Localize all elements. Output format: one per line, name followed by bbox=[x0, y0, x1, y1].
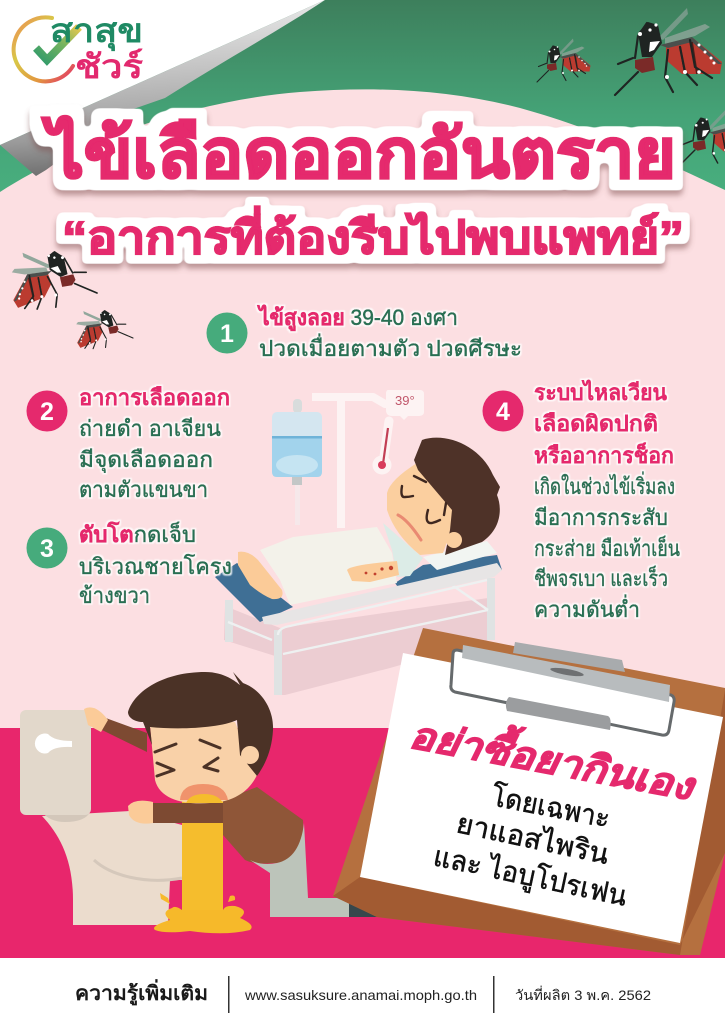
IV bag bbox=[272, 399, 322, 525]
patient hair bbox=[414, 438, 500, 555]
logo ring bbox=[14, 17, 73, 81]
vomit splash drops bbox=[160, 893, 235, 904]
subtitle: “อาการที่ต้องรีบไปพบแพทย์” bbox=[62, 206, 684, 263]
shoe bbox=[349, 898, 377, 917]
symptom 4 line: เกิดในช่วงไข้เริ่มลง bbox=[534, 471, 675, 499]
patient on bed illustration bbox=[215, 390, 502, 695]
collar bbox=[383, 523, 423, 577]
floor bbox=[0, 728, 725, 958]
toilet tank shadow bbox=[42, 812, 90, 822]
mosquito left large bbox=[0, 233, 97, 323]
clipboard line 2: ยาแอสไพริน bbox=[454, 808, 612, 870]
title: ไข้เลือดออกอันตราย bbox=[42, 115, 676, 192]
clipboard paper bbox=[360, 653, 723, 943]
pillow bbox=[423, 541, 497, 570]
footer bbox=[0, 958, 725, 1024]
symptom 3 heading: ตับโตกดเจ็บ bbox=[79, 520, 196, 547]
vomit in mouth bbox=[186, 794, 223, 803]
mosquito top right bbox=[615, 8, 722, 95]
thermometer bbox=[372, 421, 392, 474]
badge 4 bbox=[482, 390, 524, 432]
clip plate bbox=[462, 645, 670, 702]
clipboard line 1: โดยเฉพาะ bbox=[489, 779, 613, 834]
logo word pink: ชัวร์ bbox=[75, 48, 143, 85]
symptom 4 heading: ระบบไหลเวียน bbox=[534, 379, 667, 405]
number 4: 4 bbox=[496, 398, 510, 426]
symptom 4 line: มีอาการกระสับ bbox=[534, 505, 668, 530]
symptom 4 line: กระส่าย มือเท้าเย็น bbox=[534, 534, 680, 561]
green header band bbox=[0, 0, 725, 192]
toilet tank bbox=[20, 710, 91, 815]
symptom 2 bbox=[26, 385, 230, 502]
symptom 4 heading: เลือดผิดปกติ bbox=[534, 411, 658, 436]
patient face bbox=[387, 463, 463, 555]
bed top rail bbox=[262, 563, 502, 625]
mosquito right edge bbox=[680, 108, 725, 165]
clip hump bbox=[513, 642, 625, 672]
patient mouth bbox=[398, 515, 421, 540]
body bbox=[223, 787, 303, 864]
bed shadow panel bbox=[224, 598, 488, 695]
logo check mark bbox=[36, 27, 79, 60]
footer url: www.sasuksure.anamai.moph.go.th bbox=[244, 987, 477, 1003]
number 3: 3 bbox=[40, 535, 54, 563]
temperature bubble bbox=[386, 390, 424, 420]
man face bbox=[150, 722, 257, 803]
clip handle bbox=[506, 697, 611, 730]
front hand bbox=[128, 801, 153, 824]
symptom 4 line: ชีพจรเบา และเร็ว bbox=[534, 564, 668, 591]
symptom 2 line: มีจุดเลือดออก bbox=[79, 447, 213, 473]
back arm bbox=[102, 717, 147, 752]
bowl shadow line bbox=[94, 860, 182, 880]
symptom 2 line: ถ่ายดำ อาเจียน bbox=[79, 416, 221, 441]
white peeled corner bbox=[0, 0, 325, 145]
vomiting man illustration bbox=[20, 672, 377, 933]
symptom 2 heading: อาการเลือดออก bbox=[79, 385, 230, 410]
man hair bbox=[128, 672, 273, 776]
temperature text: 39° bbox=[395, 393, 415, 408]
patient eyes bbox=[401, 476, 446, 523]
footer date: วันที่ผลิต 3 พ.ค. 2562 bbox=[515, 986, 651, 1003]
vomit puddle bbox=[154, 906, 252, 933]
front arm bbox=[153, 803, 223, 823]
man mouth bbox=[180, 784, 228, 800]
number 2: 2 bbox=[40, 398, 54, 426]
symptom 4 bbox=[482, 379, 680, 622]
clipboard bottom edge bbox=[333, 690, 725, 955]
symptom 4 heading: หรืออาการช็อก bbox=[534, 441, 674, 468]
mosquito left small bbox=[67, 298, 133, 358]
symptom 1 second line: ปวดเมื่อยตามตัว ปวดศีรษะ bbox=[259, 333, 522, 361]
clip ring bbox=[451, 650, 674, 735]
bed rails bbox=[228, 580, 488, 654]
clipboard bbox=[333, 628, 725, 955]
back hand bbox=[84, 707, 108, 732]
footer heading: ความรู้เพิ่มเติม bbox=[75, 978, 208, 1007]
IV stand bbox=[312, 397, 392, 528]
symptom 2 line: ตามตัวแขนขา bbox=[79, 477, 208, 502]
mattress bbox=[215, 555, 502, 622]
man ear bbox=[241, 746, 259, 764]
clip slot bbox=[550, 666, 584, 678]
logo bbox=[14, 12, 143, 85]
flush handle bbox=[35, 734, 72, 754]
symptom 3 line: ข้างขวา bbox=[79, 583, 150, 608]
blanket bbox=[260, 527, 397, 605]
pants bbox=[250, 823, 349, 917]
symptom 1 text: ไข้สูงลอย 39-40 องศา bbox=[257, 304, 458, 332]
feet bbox=[238, 552, 283, 599]
symptom 3 line: บริเวณชายโครง bbox=[79, 554, 232, 579]
arm with rash bbox=[347, 561, 399, 582]
toilet bowl bbox=[42, 811, 182, 925]
peel fold bbox=[0, 0, 325, 176]
clip bbox=[451, 642, 674, 735]
clipboard line 3: และ ไอบูโปรเฟน bbox=[430, 840, 630, 914]
badge 1 bbox=[206, 312, 248, 354]
symptom 3 bbox=[26, 520, 232, 608]
man eyes and brows bbox=[155, 740, 220, 776]
symptom 1 bbox=[206, 304, 522, 361]
mosquito top centre bbox=[537, 38, 590, 82]
clipboard board bbox=[333, 628, 725, 955]
badge 3 bbox=[26, 528, 68, 568]
vomit stream bbox=[182, 798, 223, 918]
patient ear bbox=[446, 532, 462, 548]
badge 2 bbox=[26, 390, 68, 432]
number 1: 1 bbox=[220, 320, 234, 348]
clipboard heading: อย่าซื้อยากินเอง bbox=[406, 707, 701, 809]
symptom 4 line: ความดันต่ำ bbox=[534, 594, 640, 622]
bed legs bbox=[229, 578, 491, 695]
logo word green: สาสุข bbox=[50, 12, 143, 52]
